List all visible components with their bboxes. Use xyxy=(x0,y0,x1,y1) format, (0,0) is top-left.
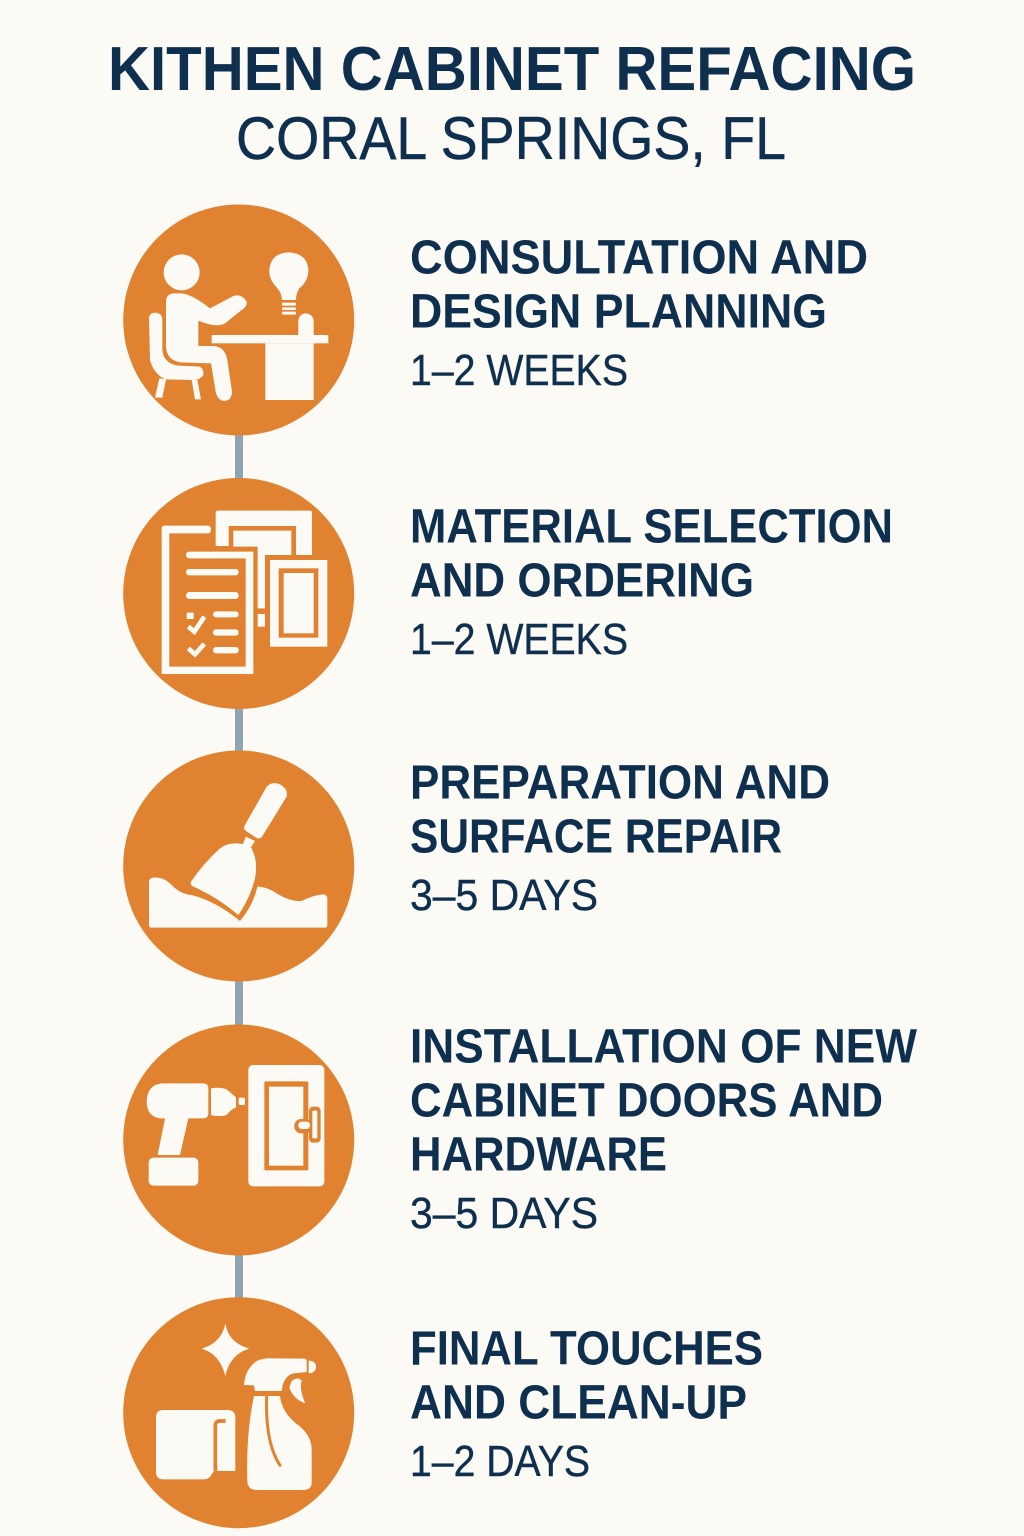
step 5 text: AND CLEAN-UP xyxy=(410,1376,747,1430)
step 3 text: SURFACE REPAIR xyxy=(410,810,782,864)
title: KITHEN CABINET REFACING xyxy=(108,35,916,104)
step 1 text xyxy=(410,232,868,395)
step 2 text xyxy=(410,500,893,664)
icon: drill and cabinet door xyxy=(123,1024,354,1256)
step 1: consultation xyxy=(123,204,868,436)
step 4 text xyxy=(410,1020,918,1238)
step 5 text: 1–2 DAYS xyxy=(410,1437,590,1486)
step 3 text xyxy=(410,756,830,920)
step 4 text: 3–5 DAYS xyxy=(410,1189,598,1238)
step 4 text: CABINET DOORS AND xyxy=(410,1074,883,1128)
step 1 text: DESIGN PLANNING xyxy=(410,286,827,338)
step 3: preparation xyxy=(123,750,830,982)
step 3 text: 3–5 DAYS xyxy=(410,871,598,920)
title xyxy=(108,35,916,172)
icon: checklist and door samples xyxy=(123,478,354,709)
step 4: installation xyxy=(123,1020,918,1256)
timeline connector xyxy=(235,430,243,1303)
step 4 text: HARDWARE xyxy=(410,1128,667,1182)
step 2 text: AND ORDERING xyxy=(410,554,754,608)
icon: sparkle, cloth and spray bottle xyxy=(123,1297,354,1528)
icon: person at desk with light bulb xyxy=(123,204,354,436)
step 2: material selection xyxy=(123,478,893,709)
icon: scraper on uneven surface xyxy=(123,750,354,982)
title: CORAL SPRINGS, FL xyxy=(236,105,786,172)
step 2 text: MATERIAL SELECTION xyxy=(410,500,893,554)
step 1 text: CONSULTATION AND xyxy=(410,232,868,284)
step 4 text: INSTALLATION OF NEW xyxy=(410,1020,918,1074)
step 2 text: 1–2 WEEKS xyxy=(410,615,628,664)
step 5 text: FINAL TOUCHES xyxy=(410,1322,763,1376)
step 3 text: PREPARATION AND xyxy=(410,756,830,810)
step 5: final touches xyxy=(123,1297,763,1528)
step 1 text: 1–2 WEEKS xyxy=(410,346,628,395)
step 5 text xyxy=(410,1322,763,1486)
